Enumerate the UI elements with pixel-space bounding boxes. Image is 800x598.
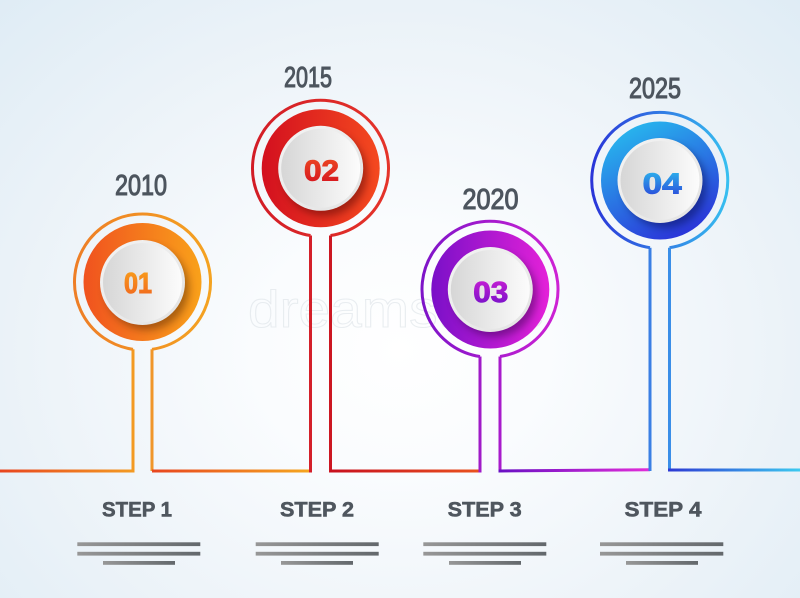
watermark: dreamstime — [248, 281, 545, 339]
step 2 — [253, 62, 481, 565]
number 04: 04 — [643, 168, 682, 200]
year: 2020: 2020 — [462, 184, 518, 216]
colored circle, step 4 — [601, 122, 719, 240]
step 4 — [592, 73, 800, 565]
number 03: 03 — [473, 277, 508, 309]
number 02: 02 — [304, 156, 339, 188]
white disc, step 3 — [448, 247, 533, 332]
label: step 4: STEP 4 — [624, 498, 702, 522]
disc shadow, step 2 — [283, 132, 367, 216]
colored circle, step 3 — [431, 230, 549, 348]
step 1 — [0, 170, 312, 565]
year: 2010: 2010 — [115, 170, 167, 202]
colored circle, step 2 — [262, 109, 380, 227]
disc shadow, step 1 — [105, 246, 189, 330]
year: 2025: 2025 — [629, 73, 681, 105]
label: step 2: STEP 2 — [280, 498, 354, 522]
outline ring and stem, step 4 — [592, 112, 800, 471]
text placeholder lines, step 4 — [600, 542, 723, 565]
text placeholder lines, step 1 — [77, 542, 200, 565]
white disc, step 1 — [100, 240, 185, 325]
step 3 — [422, 184, 650, 565]
label: step 3: STEP 3 — [448, 498, 522, 522]
number 01: 01 — [124, 268, 152, 300]
label: step 1: STEP 1 — [102, 498, 172, 522]
disc shadow, step 4 — [623, 144, 707, 228]
white disc, step 2 — [278, 126, 363, 211]
text placeholder lines, step 3 — [423, 542, 546, 565]
white disc, step 4 — [618, 138, 702, 223]
year: 2015: 2015 — [284, 62, 332, 94]
outline ring and stem, step 3 — [422, 221, 650, 472]
outline ring and stem, step 2 — [253, 100, 481, 473]
colored circle, step 1 — [84, 223, 202, 341]
disc shadow, step 3 — [453, 253, 537, 337]
outline ring and stem, step 1 — [0, 214, 312, 471]
text placeholder lines, step 2 — [256, 542, 379, 565]
